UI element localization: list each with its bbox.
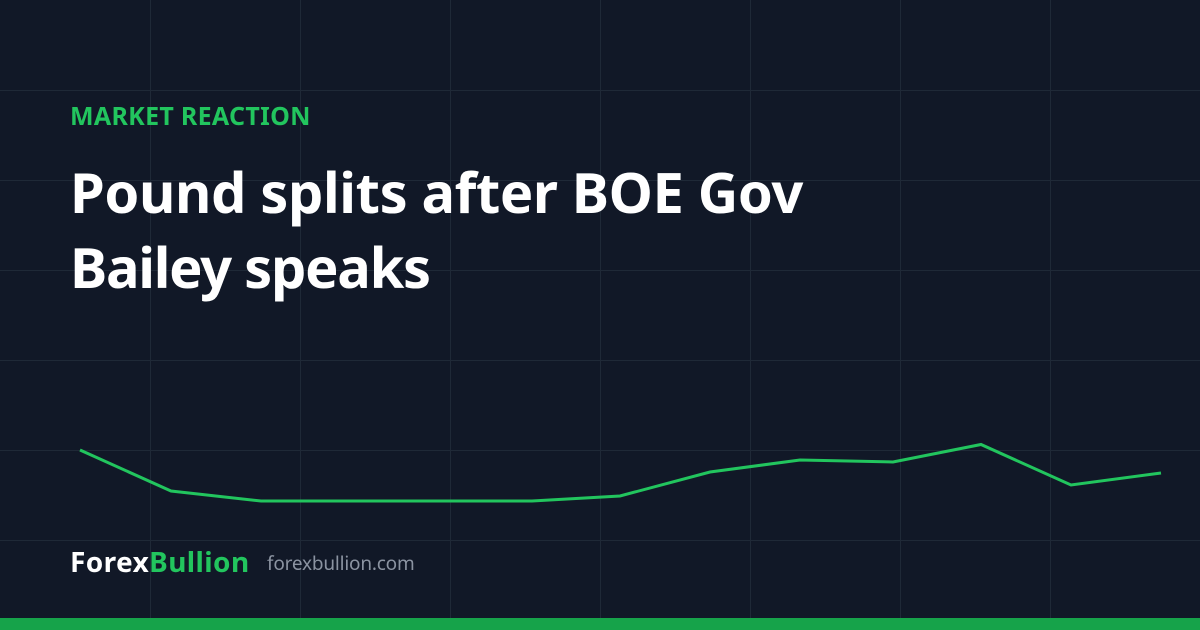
site url: forexbullion.com [267, 550, 415, 576]
title [70, 154, 804, 305]
title: Pound splits after BOE Gov [70, 154, 803, 230]
line chart [80, 444, 1161, 501]
title: Bailey speaks [70, 229, 430, 305]
eyebrow label: MARKET REACTION [70, 99, 311, 133]
brand logo: ForexBullion [70, 543, 250, 581]
bottom accent bar [0, 618, 1200, 630]
